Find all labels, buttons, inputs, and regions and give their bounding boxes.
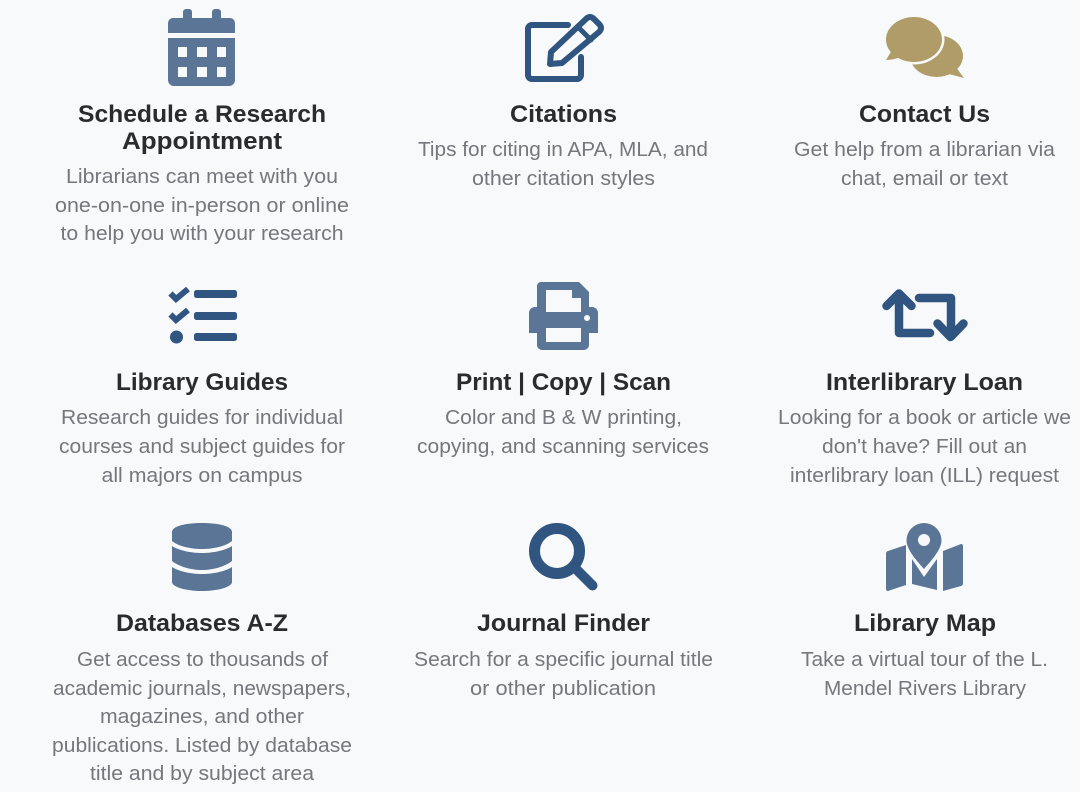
description: chat, email or text bbox=[841, 168, 1008, 190]
description: other citation styles bbox=[472, 168, 655, 190]
heading: Journal Finder bbox=[477, 610, 650, 637]
description: publications. Listed by database bbox=[52, 735, 352, 757]
description: copying, and scanning services bbox=[417, 436, 709, 458]
description: Librarians can meet with you bbox=[66, 166, 338, 188]
description bbox=[418, 139, 708, 190]
description bbox=[59, 407, 345, 487]
panel: citations bbox=[418, 17, 708, 190]
description bbox=[52, 649, 352, 785]
icon: pencil on square bbox=[528, 17, 601, 79]
icon: exchange arrows bbox=[886, 294, 964, 337]
description: Get help from a librarian via bbox=[794, 139, 1056, 161]
panel: schedule a research appointment bbox=[55, 9, 349, 245]
description: Search for a specific journal title bbox=[414, 649, 713, 671]
heading: Citations bbox=[510, 101, 617, 128]
heading: Library Map bbox=[854, 610, 996, 637]
description: one-on-one in-person or online bbox=[55, 195, 349, 217]
description: to help you with your research bbox=[60, 223, 344, 245]
heading bbox=[78, 101, 326, 155]
icon: database bbox=[172, 523, 232, 591]
description: Get access to thousands of bbox=[77, 649, 328, 671]
panel: contact us bbox=[794, 14, 1056, 190]
heading: Appointment bbox=[122, 128, 282, 155]
description: magazines, and other bbox=[100, 706, 304, 728]
description: Research guides for individual bbox=[61, 407, 343, 429]
icon: printer bbox=[529, 282, 598, 350]
description: Tips for citing in APA, MLA, and bbox=[418, 139, 708, 161]
description: or other publication bbox=[470, 678, 656, 700]
heading: Contact Us bbox=[859, 101, 990, 128]
description: interlibrary loan (ILL) request bbox=[790, 465, 1059, 487]
heading: Interlibrary Loan bbox=[826, 369, 1023, 396]
description bbox=[417, 407, 709, 458]
description: title and by subject area bbox=[90, 763, 315, 785]
heading: Print | Copy | Scan bbox=[456, 369, 671, 396]
heading: Schedule a Research bbox=[78, 101, 326, 128]
panel: library guides bbox=[59, 289, 345, 487]
description: academic journals, newspapers, bbox=[53, 678, 351, 700]
description bbox=[414, 649, 713, 700]
panel: print copy scan bbox=[417, 282, 709, 458]
description: courses and subject guides for bbox=[59, 436, 345, 458]
panel: library map bbox=[801, 523, 1048, 700]
panel: interlibrary loan bbox=[778, 294, 1071, 487]
description bbox=[794, 139, 1056, 190]
description: Looking for a book or article we bbox=[778, 407, 1071, 429]
icon: magnifier bbox=[534, 528, 592, 586]
description: all majors on campus bbox=[102, 465, 302, 487]
description: Mendel Rivers Library bbox=[824, 678, 1026, 700]
description bbox=[801, 649, 1048, 700]
icon: chat bubbles bbox=[884, 14, 964, 78]
icon: calendar bbox=[168, 9, 235, 86]
description: Color and B & W printing, bbox=[445, 407, 682, 429]
description bbox=[55, 166, 349, 245]
icon: checklist bbox=[170, 289, 237, 344]
panel: databases a-z bbox=[52, 523, 352, 785]
panel: journal finder bbox=[414, 528, 713, 700]
heading: Databases A-Z bbox=[116, 610, 288, 637]
description bbox=[778, 407, 1071, 487]
description: don't have? Fill out an bbox=[822, 436, 1027, 458]
heading: Library Guides bbox=[116, 369, 288, 396]
icon: map with pin bbox=[886, 523, 963, 591]
description: Take a virtual tour of the L. bbox=[801, 649, 1048, 671]
